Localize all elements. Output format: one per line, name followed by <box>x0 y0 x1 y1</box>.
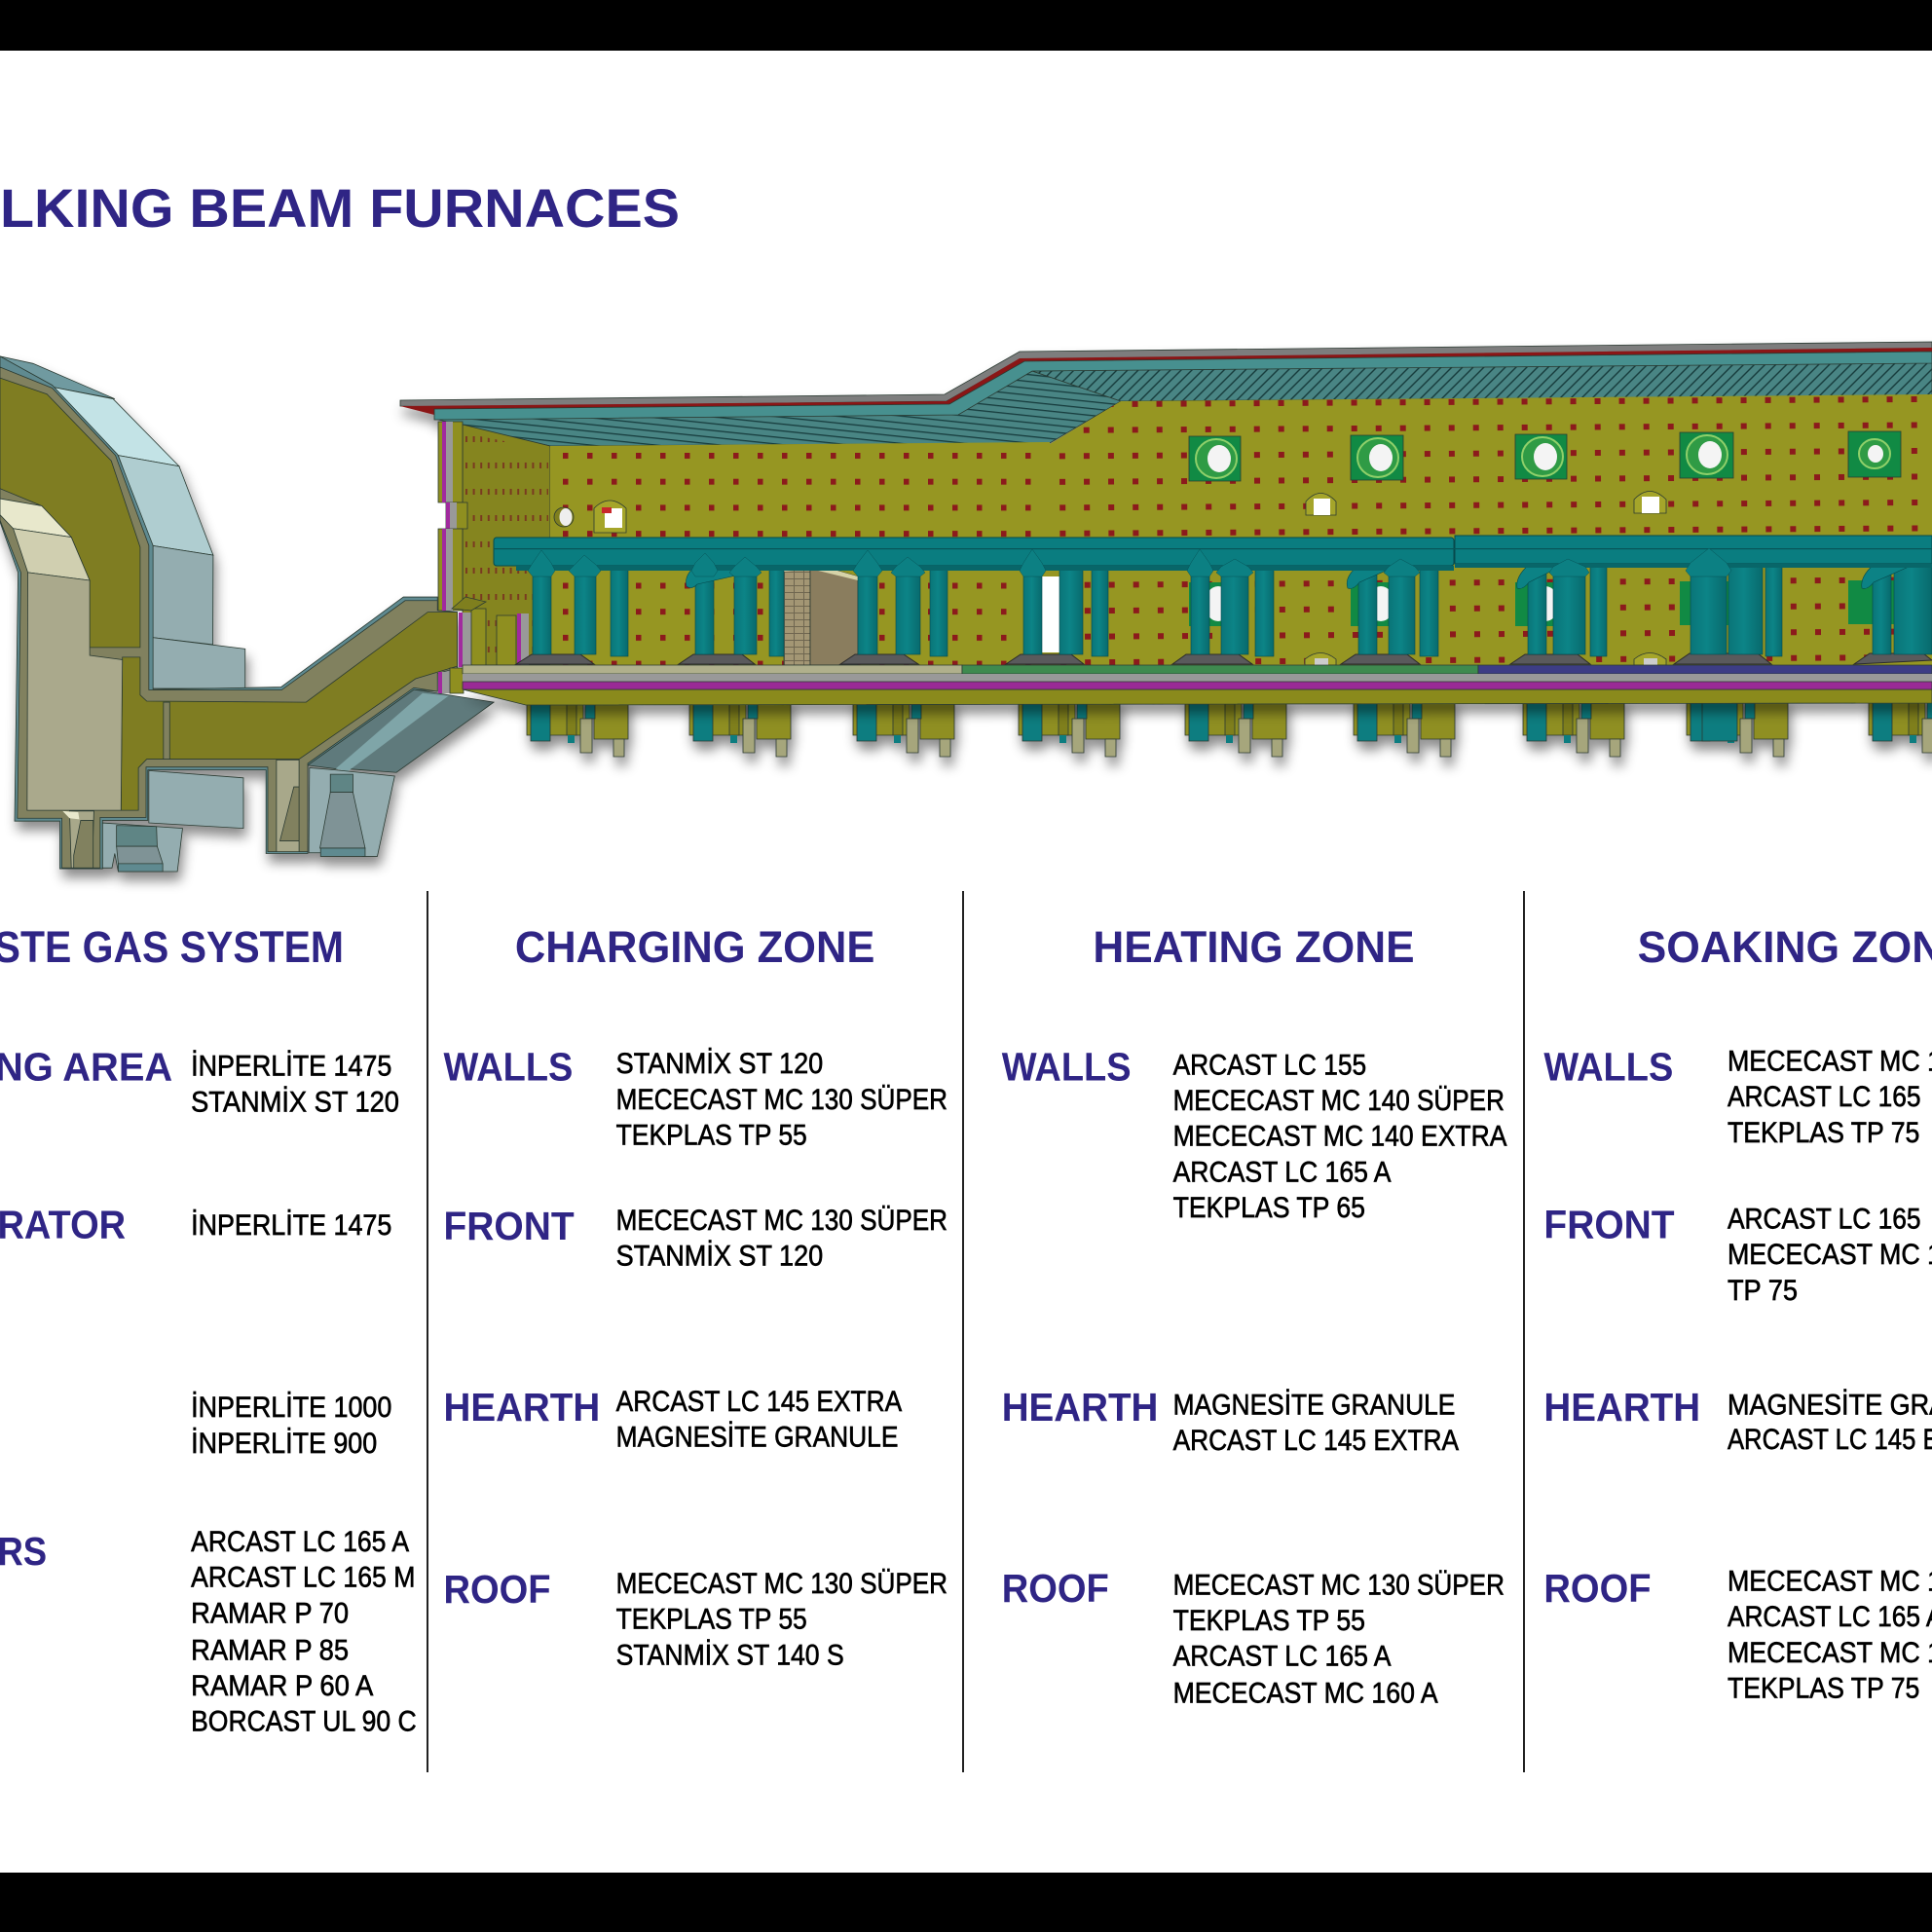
materials: walls: TEKPLAS TP 55 <box>616 1119 807 1151</box>
materials: hearth <box>616 1386 902 1453</box>
label: charging area: NG AREA <box>0 1045 172 1090</box>
materials: roof: MECECAST MC 160 A <box>1173 1678 1438 1710</box>
materials: roof <box>616 1568 947 1671</box>
wall openings <box>554 491 1666 665</box>
bottom black bar <box>0 1873 1932 1932</box>
heading: waste gas system: STE GAS SYSTEM <box>0 922 344 972</box>
front wall with red anchors, left section <box>550 442 1050 665</box>
materials: charging area: İNPERLİTE 1475 <box>191 1051 391 1083</box>
materials: walls <box>616 1048 947 1151</box>
materials: hearth: MAGNESİTE GRANULE <box>616 1421 898 1453</box>
materials: walls: MECECAST MC 140 EXTRA <box>1173 1121 1507 1153</box>
panel: waste gas system <box>0 922 417 1738</box>
waste gas duct and recuperator cross-section <box>0 356 494 872</box>
ceiling hatch left <box>434 371 1121 446</box>
materials: front: MECECAST MC 130 SÜPER <box>616 1205 947 1237</box>
brick wall segment <box>784 563 858 665</box>
label: front: FRONT <box>444 1204 575 1248</box>
label: front: FRONT <box>1543 1203 1675 1247</box>
materials: walls: STANMİX ST 120 <box>616 1048 823 1080</box>
burners on wall, upper row <box>1189 431 1901 481</box>
panel: heating zone <box>1002 922 1507 1710</box>
materials: recuperator: İNPERLİTE 1475 <box>191 1209 391 1242</box>
label: hearth: HEARTH <box>444 1385 600 1430</box>
materials: hearth: ARCAST LC 145 EXTRA <box>616 1386 902 1418</box>
materials: walls: MECECAST MC 130 SÜPER <box>616 1084 947 1116</box>
label: hearth: HEARTH <box>1543 1385 1700 1430</box>
materials: charging area <box>191 1051 399 1118</box>
materials: front: STANMİX ST 120 <box>616 1240 823 1272</box>
materials: walls: TEKPLAS TP 65 <box>1173 1192 1365 1224</box>
end wall lining layers <box>438 422 529 693</box>
materials: hearth: ARCAST LC 145 EXTRA <box>1173 1425 1459 1457</box>
materials: roof: TEKPLAS TP 55 <box>616 1604 807 1636</box>
label: hearth: HEARTH <box>1002 1385 1158 1430</box>
pipe elbows <box>686 557 1909 588</box>
materials: burners: ARCAST LC 165 M <box>191 1562 415 1594</box>
materials: front <box>616 1205 947 1272</box>
roof gray plate <box>400 342 1932 407</box>
end wall with anchors <box>463 425 550 665</box>
teal support columns <box>533 550 1932 656</box>
roof teal band <box>434 352 1932 420</box>
burners on wall, lower row <box>1189 580 1901 626</box>
materials: walls: MECECAST MC 140 SÜPER <box>1173 1085 1505 1117</box>
ceiling hatch right <box>1032 362 1932 401</box>
materials: roof: ARCAST LC 165 A <box>1173 1641 1392 1673</box>
materials: roof: MECECAST MC 130 SÜPER <box>1173 1569 1505 1601</box>
panel: charging zone <box>444 922 947 1671</box>
materials: roof: MECECAST MC 130 SÜPER <box>616 1568 947 1600</box>
materials: walls: ARCAST LC 155 <box>1173 1049 1366 1081</box>
materials: roof <box>1728 1566 1932 1705</box>
roof red plate <box>400 348 1932 415</box>
materials: burners: RAMAR P 60 A <box>191 1670 374 1702</box>
label: walls: WALLS <box>444 1045 573 1090</box>
label: walls: WALLS <box>1002 1045 1132 1090</box>
column dividers <box>427 891 1525 1772</box>
materials: burners <box>191 1526 417 1738</box>
front wall with red anchors, right section <box>1050 394 1932 665</box>
heading: charging zone: CHARGING ZONE <box>515 922 874 972</box>
materials: hearth: MAGNESİTE GRANULE <box>1173 1390 1455 1422</box>
materials: roof: STANMİX ST 140 S <box>616 1639 844 1671</box>
label: recuperator: RATOR <box>0 1203 126 1247</box>
title: LKING BEAM FURNACES <box>0 177 680 239</box>
materials: walls <box>1173 1049 1507 1224</box>
materials: burners: RAMAR P 70 <box>191 1597 349 1629</box>
top black bar <box>0 0 1932 51</box>
label: roof: ROOF <box>444 1567 551 1612</box>
heading: heating zone: HEATING ZONE <box>1093 922 1415 972</box>
materials: burners: ARCAST LC 165 A <box>191 1526 409 1558</box>
column capitals <box>528 548 1731 576</box>
materials: walls: ARCAST LC 165 A <box>1173 1156 1392 1188</box>
furnace floor underside <box>463 689 1932 705</box>
materials: front: TP 75 <box>1728 1275 1798 1307</box>
main teal header beam <box>494 536 1932 571</box>
label: walls: WALLS <box>1543 1045 1673 1090</box>
materials: front <box>1728 1204 1932 1307</box>
materials: roof: TEKPLAS TP 55 <box>1173 1605 1365 1637</box>
materials: burners: BORCAST UL 90 C <box>191 1706 417 1738</box>
label: roof: ROOF <box>1543 1566 1652 1611</box>
materials: hearth <box>1728 1390 1932 1456</box>
materials: roof <box>1173 1569 1505 1710</box>
hearth beam bases <box>516 653 1932 664</box>
materials: insulation <box>191 1392 391 1460</box>
materials: insulation: İNPERLİTE 900 <box>191 1428 377 1460</box>
furnace body shell <box>400 342 1932 705</box>
materials: burners: RAMAR P 85 <box>191 1634 349 1666</box>
furnace legs and supports below the floor <box>527 693 1932 757</box>
panel: soaking zone <box>1543 922 1932 1705</box>
furnace floor layers <box>463 665 1932 689</box>
materials: insulation: İNPERLİTE 1000 <box>191 1392 391 1424</box>
materials: hearth <box>1173 1390 1459 1457</box>
label: roof: ROOF <box>1002 1566 1109 1611</box>
materials: charging area: STANMİX ST 120 <box>191 1086 399 1118</box>
materials: walls <box>1728 1046 1932 1149</box>
